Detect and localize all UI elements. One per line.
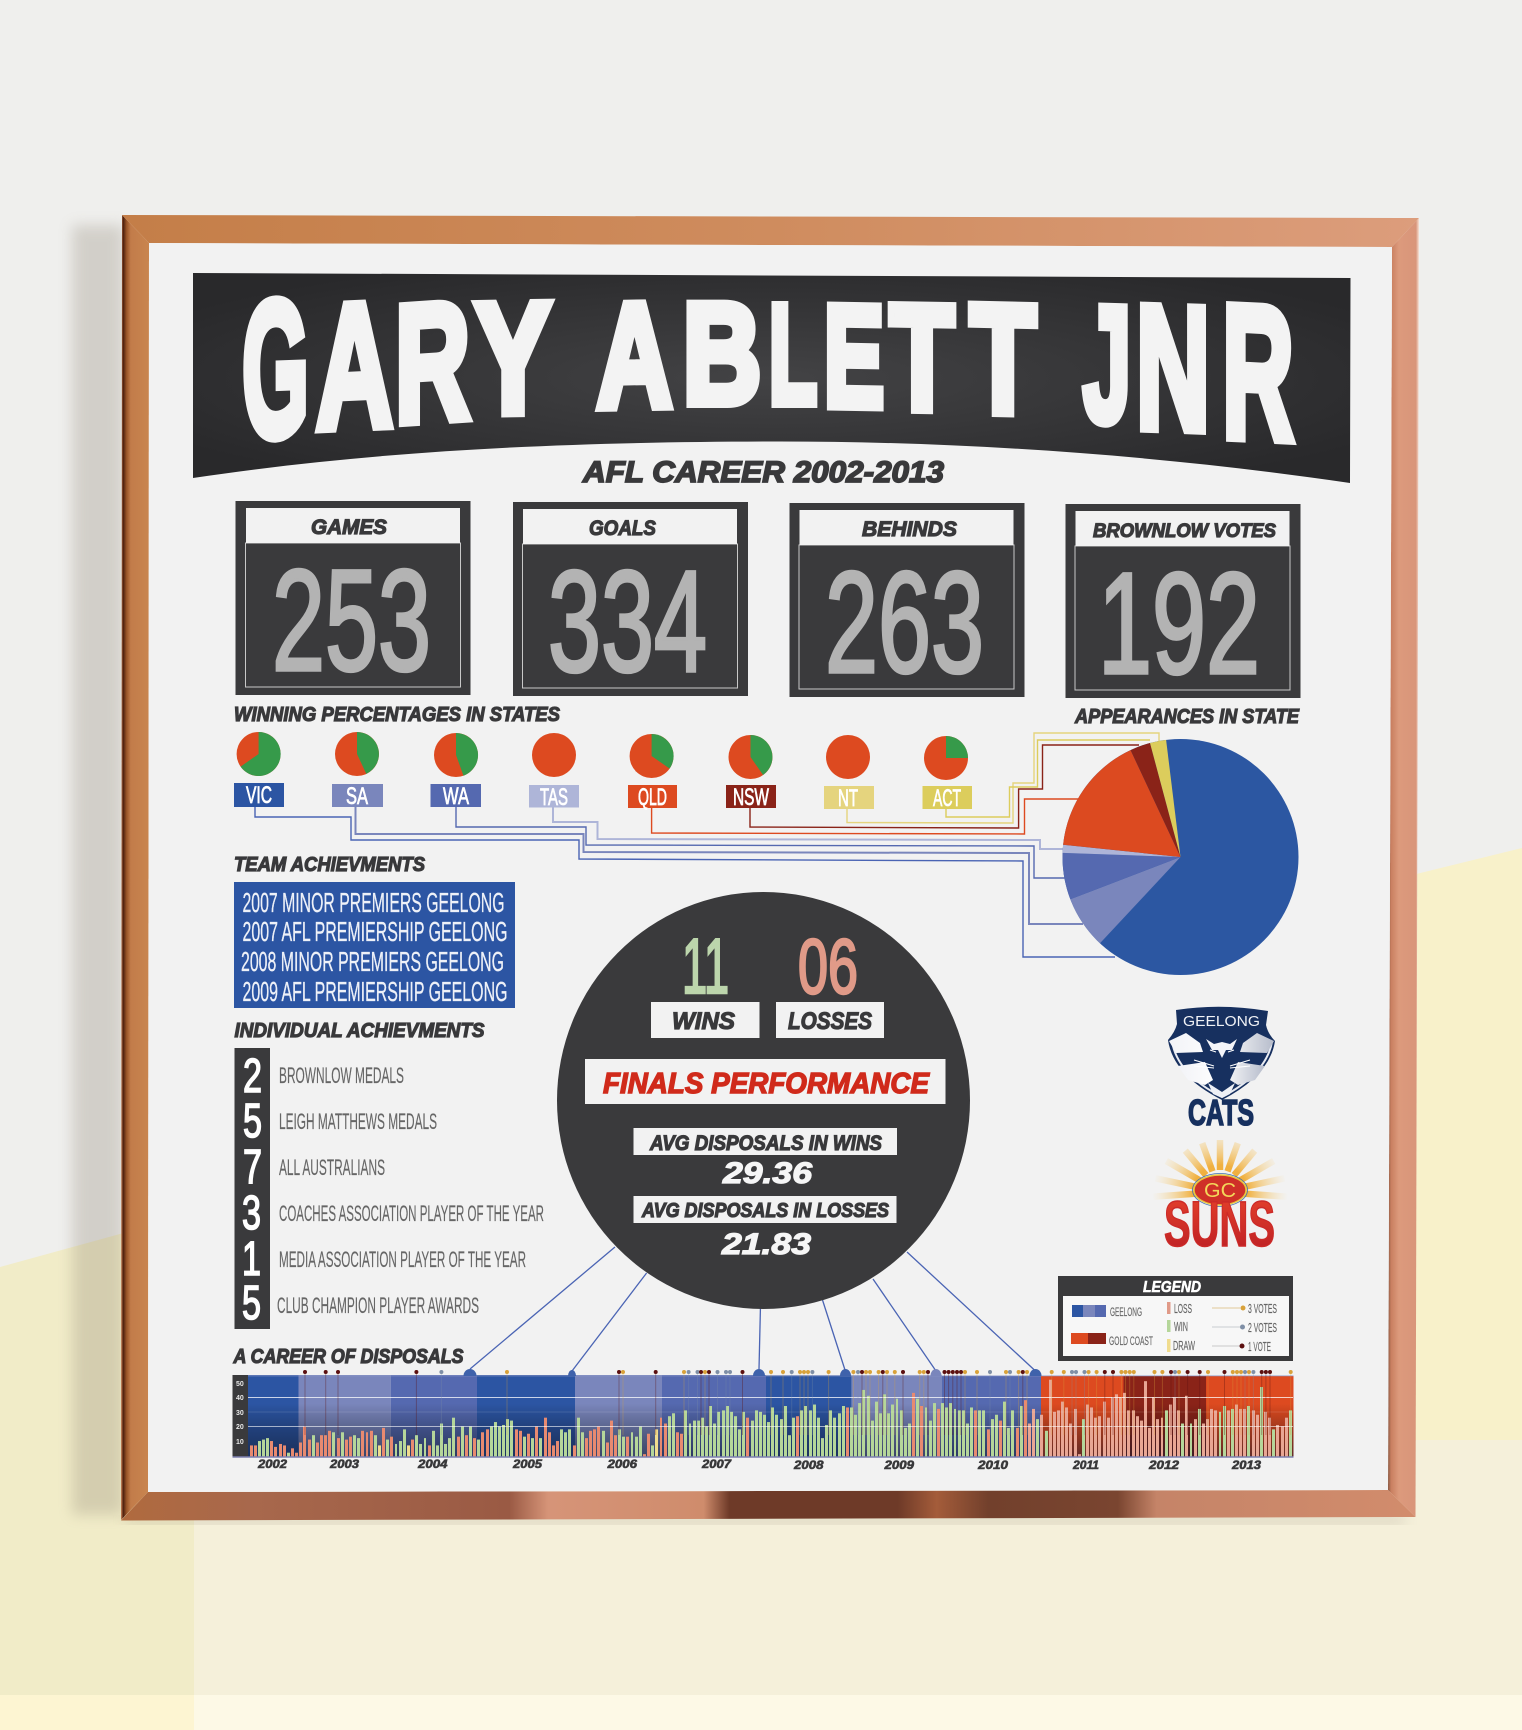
title: GARY ABLETT JNR: G [242, 260, 309, 479]
NSW [726, 735, 776, 811]
connector lines from finals circle to finals in chart [470, 1247, 1036, 1371]
QLD [628, 734, 677, 811]
team achievements list: 2008 MINOR PREMIERS GEELONG [241, 946, 504, 977]
stat card: games: 253 [272, 540, 431, 701]
individual achievements list: CLUB CHAMPION PLAYER AWARDS [277, 1293, 479, 1318]
year labels: 2009 [883, 1460, 915, 1472]
title: GARY ABLETT JNR: N [1136, 270, 1210, 468]
legend: bar colours: LOSS [1174, 1301, 1192, 1316]
avg disposals in wins [634, 1128, 897, 1190]
y axis: 10 [236, 1439, 244, 1446]
y axis: 40 [236, 1395, 244, 1402]
legend: bar colours: DRAW [1173, 1338, 1195, 1353]
avg disposals in losses [634, 1196, 896, 1261]
legend: bar colours: WIN [1174, 1319, 1188, 1334]
individual achievements list: 7 [243, 1141, 262, 1194]
stat card: goals: GOALS [589, 517, 656, 540]
title: GARY ABLETT JNR: T [890, 274, 954, 442]
y axis [232, 1375, 248, 1457]
title: GARY ABLETT JNR: A [316, 265, 393, 466]
stat card: games [236, 501, 470, 701]
title: GARY ABLETT JNR: R [1222, 266, 1294, 481]
team achievements list [234, 882, 515, 1008]
title: GARY ABLETT JNR: R [395, 268, 470, 458]
legend: votes: 1 VOTE [1248, 1339, 1271, 1354]
title: GARY ABLETT JNR: Y [475, 271, 551, 447]
heading: individual achievements: INDIVIDUAL ACHIEVMENTS [234, 1020, 485, 1042]
state win pies and labels [234, 732, 972, 812]
y axis: 30 [236, 1410, 244, 1417]
individual achievements list: COACHES ASSOCIATION PLAYER OF THE YEAR [279, 1201, 544, 1226]
individual achievements list: 5 [243, 1095, 262, 1148]
title: GARY ABLETT JNR: L [769, 275, 817, 433]
stat card: brownlow votes: BROWNLOW VOTES [1093, 521, 1276, 542]
state connector lines [255, 733, 1159, 957]
year labels: 2007 [701, 1459, 732, 1471]
individual achievements list: BROWNLOW MEDALS [279, 1063, 404, 1088]
individual achievements list: 5 [242, 1277, 261, 1330]
title: GARY ABLETT JNR [242, 260, 1294, 481]
legend [1058, 1276, 1293, 1361]
year labels [257, 1459, 1262, 1472]
NSW: NSW [733, 784, 769, 811]
losses label: LOSSES [788, 1008, 872, 1035]
title banner [193, 260, 1350, 483]
brownlow vote stems and dots [305, 1372, 1291, 1435]
wins count: 11 [682, 922, 729, 1010]
title: GARY ABLETT JNR: E [824, 276, 884, 438]
individual achievements list: 1 [242, 1233, 261, 1286]
heading: a career of disposals: A CAREER OF DISPOSALS [233, 1346, 464, 1368]
avg disposals in losses: 21.83 [721, 1228, 811, 1261]
avg disposals in wins: 29.36 [722, 1157, 812, 1190]
legend: Geelong swatch: GEELONG [1110, 1305, 1142, 1319]
legend: Gold Coast swatch [1071, 1333, 1153, 1348]
stat card: behinds: 263 [825, 542, 984, 703]
legend: LEGEND [1143, 1279, 1201, 1296]
year labels: 2011 [1072, 1460, 1099, 1472]
stat card: goals [513, 502, 748, 702]
stat card: behinds: BEHINDS [862, 518, 957, 541]
individual achievements list: 2 [243, 1050, 262, 1103]
logo: Gold Coast Suns [1152, 1140, 1288, 1260]
legend: votes [1212, 1301, 1277, 1354]
year labels: 2006 [606, 1459, 638, 1471]
year labels: 2003 [329, 1459, 360, 1471]
stat card: brownlow votes: 192 [1098, 543, 1260, 704]
y axis: 20 [236, 1424, 244, 1431]
copper picture frame [121, 215, 1419, 1520]
title: GARY ABLETT JNR: B [683, 275, 761, 434]
year labels: 2008 [793, 1460, 824, 1472]
VIC: VIC [246, 782, 272, 809]
NT: NT [838, 785, 858, 812]
wins label: WINS [672, 1008, 735, 1035]
career of disposals chart [232, 1369, 1294, 1472]
team achievements list: 2009 AFL PREMIERSHIP GEELONG [242, 976, 508, 1007]
ACT: ACT [933, 785, 961, 812]
logo: Gold Coast Suns: SUNS [1164, 1188, 1275, 1260]
year labels: 2010 [977, 1460, 1009, 1472]
individual achievements list: ALL AUSTRALIANS [279, 1155, 385, 1180]
title: GARY ABLETT JNR: J [1083, 272, 1131, 457]
year labels: 2013 [1231, 1460, 1262, 1472]
WA [430, 733, 481, 810]
individual achievements list [234, 1048, 544, 1330]
legend: votes: 3 VOTES [1248, 1301, 1277, 1316]
grid lines [232, 1398, 1294, 1457]
stat card: goals: 334 [548, 541, 707, 702]
SA [332, 732, 383, 810]
WA: WA [443, 783, 469, 810]
avg disposals in wins: AVG DISPOSALS IN WINS [649, 1132, 882, 1155]
legend: votes: 2 VOTES [1248, 1320, 1277, 1335]
VIC [234, 732, 284, 809]
stat card: games: GAMES [311, 516, 387, 539]
legend: Geelong swatch [1072, 1305, 1142, 1319]
team achievements list: 2007 AFL PREMIERSHIP GEELONG [242, 916, 508, 947]
losses count: 06 [798, 922, 858, 1010]
team achievements list: 2007 MINOR PREMIERS GEELONG [242, 887, 504, 918]
year labels: 2012 [1148, 1460, 1180, 1472]
disposal bars per game [249, 1376, 1294, 1457]
losses label [776, 1002, 884, 1038]
TAS [529, 733, 579, 811]
finals performance circle [557, 892, 970, 1309]
title: GARY ABLETT JNR: T [970, 273, 1036, 446]
logo: Geelong Cats: GEELONG [1183, 1014, 1260, 1030]
TAS: TAS [540, 784, 568, 811]
year labels: 2002 [257, 1459, 288, 1471]
legend: Gold Coast swatch: GOLD COAST [1109, 1334, 1153, 1348]
wins label [651, 1002, 760, 1038]
SA: SA [346, 783, 368, 810]
individual achievements list: 3 [242, 1187, 261, 1240]
stat card: brownlow votes [1066, 504, 1300, 704]
finals markers on chart top [464, 1369, 1042, 1376]
appearances pie chart [1062, 739, 1298, 975]
avg disposals in losses: AVG DISPOSALS IN LOSSES [641, 1200, 890, 1222]
individual achievements list: LEIGH MATTHEWS MEDALS [279, 1109, 437, 1134]
subtitle: AFL CAREER 2002-2013 [582, 456, 944, 489]
title: GARY ABLETT JNR: A [597, 273, 672, 439]
stat card: behinds [790, 503, 1024, 703]
logo: Geelong Cats: CATS [1188, 1092, 1254, 1133]
year labels: 2004 [417, 1459, 448, 1471]
finals performance label [585, 1059, 946, 1104]
y axis: 50 [236, 1381, 244, 1388]
season colour bands [232, 1375, 1294, 1458]
heading: winning percentages: WINNING PERCENTAGES IN STATES [234, 704, 561, 726]
year labels: 2005 [512, 1459, 543, 1471]
NT [824, 735, 874, 812]
individual achievements list: MEDIA ASSOCIATION PLAYER OF THE YEAR [279, 1247, 526, 1272]
QLD: QLD [638, 784, 667, 811]
heading: team achievements: TEAM ACHIEVMENTS [234, 854, 426, 876]
finals performance label: FINALS PERFORMANCE [603, 1068, 931, 1100]
logo: Geelong Cats [1168, 1007, 1275, 1133]
heading: appearances in state: APPEARANCES IN STATE [1074, 706, 1300, 728]
ACT [922, 736, 972, 812]
legend: bar colours [1167, 1301, 1195, 1353]
logo: Gold Coast Suns: GC [1204, 1180, 1236, 1202]
